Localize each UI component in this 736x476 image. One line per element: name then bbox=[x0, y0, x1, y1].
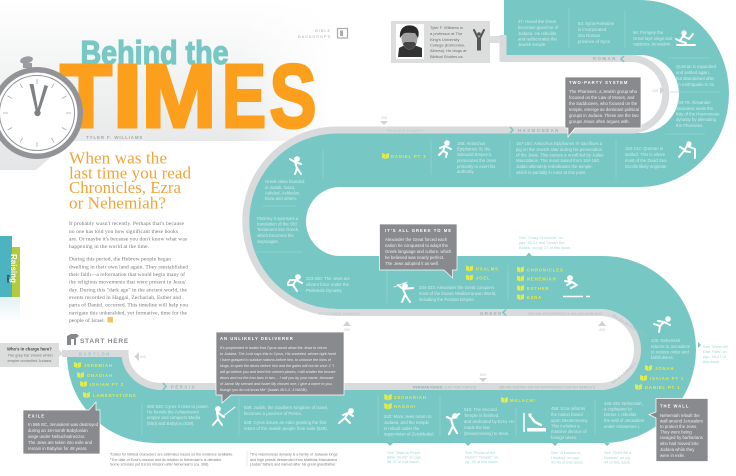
Persian period events: return of the Jewish people from exile (539). bbox=[244, 426, 328, 431]
intro body text: It probably wasn't recently. Perhaps that's because bbox=[69, 221, 185, 227]
book list: Babylonian exile: OBADIAH bbox=[87, 373, 113, 378]
Roman period events: Qumran is expanded bbox=[676, 64, 716, 69]
year markers: 300 and 400: 400 bbox=[599, 328, 605, 332]
events: Nehemiah rebuilds: under Artaxerxes I. bbox=[604, 424, 640, 429]
Roman period events: province of Syria bbox=[578, 39, 611, 44]
author bio panel bbox=[391, 21, 500, 63]
Roman period events: dynasty by alienating bbox=[676, 117, 717, 122]
Greek colonies events: vibrant force under the bbox=[306, 282, 350, 287]
events: temple rebuilt: is rebuilt under the bbox=[384, 426, 420, 431]
author bio panel: College (Edmonton, bbox=[430, 42, 465, 48]
Nehemiah return events: returns to Jerusalem bbox=[651, 344, 691, 349]
events: temple rebuilt: and dedicated by Ezra. He bbox=[464, 419, 515, 424]
footnotes: Some scholars put Ezra's mission after Nehemiah's (ca. 398). bbox=[110, 462, 209, 466]
Hasmonean period events: settled. This is where bbox=[625, 152, 666, 157]
book list: Jonah, Isaiah, Daniel: ISAIAH PT 1 bbox=[650, 376, 684, 381]
events: temple rebuilt: HAGGAI bbox=[394, 404, 416, 409]
footnotes: ²The date of Ezra's mission and its relation to Nehemiah's is debated. bbox=[110, 458, 222, 462]
intro body text: are. Or maybe it's because you don't know what was bbox=[69, 236, 187, 242]
intro body text: happening in the world at the time. bbox=[69, 244, 150, 250]
section tag: Bible Backdrops: BIBLE bbox=[315, 29, 331, 33]
book list: Chronicles to Ezra bbox=[517, 266, 564, 300]
see notes under ribbon: 44 of this issue. bbox=[604, 460, 631, 464]
callout: exile: The Jews are taken into exile and bbox=[28, 440, 93, 445]
Nehemiah return events: faithfulness. bbox=[651, 355, 674, 360]
Greek colonies events: Dora and others. bbox=[265, 196, 297, 201]
Roman period events: into Roman bbox=[578, 33, 601, 38]
see notes under ribbon: Downer" on pg. bbox=[604, 455, 631, 460]
icon: diver bbox=[524, 413, 546, 432]
events: Malachi and Ezra: massive divorce of bbox=[551, 429, 587, 434]
track label: Persian kings bbox=[413, 386, 595, 390]
events: Nehemiah rebuilds: Darius I, rebuilds bbox=[604, 412, 636, 417]
track labels: Ptolemaic and Greek: PTOLEMAIC DYNASTY bbox=[319, 312, 361, 316]
Hasmonean period events bbox=[382, 141, 668, 175]
events: Malachi and Ezra: upon Deuteronomy. bbox=[551, 418, 588, 423]
Roman period events: 103-76: Alexander bbox=[676, 100, 711, 105]
callout: the wall: wall around Jerusalem bbox=[660, 418, 703, 424]
callout: two-party system bbox=[565, 77, 641, 137]
callout: who's in charge: empire controlled Judaea. bbox=[8, 358, 52, 363]
Roman period events: Jannaeus seals the bbox=[676, 106, 714, 111]
events: Malachi and Ezra: This includes a bbox=[551, 424, 580, 428]
track labels: Babylon and Persia: BABYLON bbox=[79, 352, 111, 356]
Roman period events: an earthquake in 31. bbox=[676, 82, 715, 87]
callout: it's all Greek to me: he believed was nearly perfect. bbox=[385, 255, 444, 260]
callout: an unlikely deliverer: doors and cut the iron bars in two.... I call you by your name, because bbox=[220, 376, 334, 380]
see notes under ribbon: See "Don't Be a bbox=[604, 450, 632, 455]
Roman period events: becomes governor of bbox=[518, 25, 559, 30]
Roman period events: 66: Pompey the bbox=[633, 30, 664, 35]
Persian period events: 550-530: Cyrus II rises to power. bbox=[147, 404, 209, 409]
see notes under ribbon: Leaving" on pgs. bbox=[551, 455, 580, 460]
callout: the wall: THE WALL bbox=[660, 404, 689, 408]
callout: who's in charge: The grey bar shows which bbox=[8, 352, 53, 358]
Hasmonean period events: which is partially in ruins at this point. bbox=[516, 170, 587, 175]
book list: Psalms, Joel: PSALMS bbox=[476, 266, 499, 272]
track labels: Ptolemaic and Greek bbox=[319, 310, 602, 316]
year marker: 200 bbox=[380, 116, 388, 125]
heading: TIMES: T bbox=[60, 47, 112, 147]
see notes under ribbon bbox=[387, 443, 632, 464]
track label: Roman: ROMAN bbox=[593, 56, 617, 61]
callout: two-party system: groups in Judaea. These are the two bbox=[569, 113, 639, 118]
book list: Psalms, Joel bbox=[466, 266, 499, 280]
intro body text bbox=[69, 221, 188, 324]
intro question heading: Chronicles, Ezra bbox=[69, 178, 182, 197]
book list: Babylonian exile: JEREMIAH bbox=[84, 363, 113, 368]
Greek colonies events: Septuagint. bbox=[257, 239, 279, 244]
callout: the wall bbox=[649, 398, 708, 462]
callout: who's in charge: Who's in charge here? bbox=[7, 346, 52, 352]
Roman period events: 63: Syria-Palestine bbox=[578, 21, 615, 26]
see notes under ribbon: Return: Temple" on bbox=[465, 454, 498, 460]
events: Malachi and Ezra: MALACHI bbox=[510, 398, 536, 403]
callout: the wall: to protect the Jews. bbox=[660, 424, 697, 429]
intro question heading: When was the bbox=[69, 148, 167, 168]
icon: running figure bbox=[339, 409, 353, 423]
Greek colonies events: including the Persian Empire. bbox=[419, 297, 475, 302]
callout: an unlikely deliverer: of Jacob My servant and Israel My chosen one, I give a name to you, bbox=[220, 382, 333, 386]
Roman period events: Judaea. He rebuilds bbox=[518, 31, 556, 36]
side magazine thumbnail: Bad bbox=[6, 275, 11, 283]
events: Nehemiah rebuilds: 445-433: Nehemiah, bbox=[604, 401, 643, 406]
intro body text: events recorded in Haggai, Zechariah, Esther and bbox=[69, 295, 181, 301]
year marker: 600 bbox=[134, 352, 146, 361]
events: temple rebuilt: (Deuteronomy) to them. bbox=[464, 431, 509, 436]
events: Nehemiah rebuilds: the wall of Jerusalem bbox=[604, 418, 645, 423]
Nehemiah return events bbox=[651, 338, 691, 360]
Persian period events: empire and conquers Media bbox=[147, 415, 201, 420]
events: Malachi and Ezra: foreign wives. bbox=[551, 435, 577, 440]
Roman period events: Great lays siege and bbox=[633, 36, 673, 41]
Hasmonean period events: persecutes the Jews bbox=[457, 158, 496, 163]
Greek colonies events: 334-323: Alexander the Great conquers bbox=[419, 285, 494, 290]
track labels: Ptolemaic and Greek: GREEK bbox=[480, 311, 503, 316]
Hasmonean period events: Judas ultimately rededicates the temple, bbox=[516, 164, 593, 169]
footnotes: ³The Hasmonean dynasty is a family of Judaean kings bbox=[250, 452, 338, 456]
events: temple rebuilt bbox=[384, 394, 515, 436]
footnotes: (Judas' father) and named after his great-grandfather. bbox=[250, 462, 336, 466]
icon: hurdler bbox=[679, 142, 695, 158]
events: Malachi and Ezra bbox=[501, 397, 588, 440]
title backdrop bbox=[0, 0, 331, 170]
callout: it's all Greek to me: IT'S ALL GREEK TO ME bbox=[385, 228, 452, 233]
track labels: Seleucid and Hasmonean: HASMONEAN bbox=[518, 128, 560, 133]
callout: an unlikely deliverer bbox=[216, 332, 344, 403]
grey empire track bbox=[62, 35, 666, 386]
Roman period events: but abandoned after bbox=[676, 76, 715, 81]
intro body text: navigate this unheralded, yet formative, time for the bbox=[69, 309, 188, 316]
events: temple rebuilt: Temple is finished, bbox=[464, 413, 499, 418]
book list: Jonah, Isaiah, Daniel: JONAH bbox=[655, 366, 674, 371]
year marker: 600: 600 bbox=[140, 355, 146, 359]
track labels: Babylon and Persia bbox=[79, 352, 196, 390]
intro body text: the religious movements that were present in Jesus' bbox=[69, 280, 186, 286]
author bio panel: a professor at The bbox=[430, 31, 463, 36]
Roman period events: and rediscorates the bbox=[518, 36, 558, 42]
see note: When All Else Fails: See "When All bbox=[703, 344, 728, 349]
callout: the wall: Judaea while they bbox=[660, 447, 695, 452]
callout: exile: siege under Nebuchadnezzar. bbox=[28, 434, 85, 439]
side magazine thumbnail: Raising bbox=[9, 254, 18, 283]
track labels: Seleucid and Hasmonean: SELEUCID DYNASTY bbox=[386, 129, 426, 133]
Roman period events: is incorporated bbox=[578, 27, 607, 32]
intro body text: day. During this "dark age" in the ancient world, the bbox=[69, 287, 188, 293]
callout: it's all Greek to me: Alexander the Great forced each bbox=[385, 237, 448, 242]
intro body text: no one has told you how significant these books bbox=[69, 228, 178, 235]
book list: Chronicles to Ezra: CHRONICLES bbox=[527, 268, 564, 272]
see note: When All Else Fails: Else Fails" on bbox=[703, 349, 727, 354]
callout: it's all Greek to me: The Jews adopted it as well. bbox=[385, 261, 439, 266]
heading: TIMES: I bbox=[112, 47, 143, 147]
Greek colonies events: Testament into Greek, bbox=[257, 227, 299, 232]
callout: it's all Greek to me: Greek language and culture, which bbox=[385, 249, 452, 254]
see note: When All Else Fails: pgs. 46-47 of bbox=[703, 354, 727, 359]
events: temple rebuilt: supervision of Zerubbabel. bbox=[384, 432, 435, 436]
callout: an unlikely deliverer: though you do not know Me" (Isaiah 45:1-2, 4 NASB). bbox=[220, 388, 308, 392]
track label: Persian kings: PERSIAN KINGS: (LIST AND DATES) bbox=[413, 386, 476, 390]
heading: Behind the: Behind the bbox=[80, 34, 228, 71]
footnotes bbox=[110, 451, 338, 466]
track labels: Babylon and Persia: PERSIA bbox=[171, 384, 196, 390]
events: temple rebuilt: ZECHARIAH bbox=[394, 395, 427, 400]
year marker: 200: 200 bbox=[381, 116, 387, 120]
callout: an unlikely deliverer: I have grasped to subdue nations before him, to unloose the loins of bbox=[220, 358, 332, 362]
icon: hurdle runner bbox=[654, 317, 670, 332]
book list: Babylonian exile: ISAIAH PT 2 bbox=[90, 382, 124, 387]
year marker: 100 bbox=[652, 87, 664, 94]
Greek colonies events: Ashdod, Ashkelon, bbox=[265, 190, 301, 196]
Hasmonean period events: 153-142: Qumran is bbox=[625, 146, 663, 151]
section tag: Bible Backdrops bbox=[298, 28, 348, 39]
callout: two-party system: the Sadducees, who focused on the bbox=[569, 101, 638, 106]
events: Nehemiah rebuilds bbox=[604, 401, 645, 429]
Hasmonean period events: of the Jews. This causes a revolt led by Judas bbox=[516, 152, 604, 158]
book list: Jonah, Isaiah, Daniel: DANIEL PT 1 bbox=[645, 385, 680, 390]
year markers: 300 and 400: 300 bbox=[344, 328, 350, 332]
track labels: Ptolemaic and Greek: 359-338 ARTAXERXES III 336-330 DARIUS III bbox=[528, 312, 602, 316]
Roman period events: fate of the Hasmonean bbox=[676, 112, 720, 116]
Hasmonean period events: DANIEL PT 3 bbox=[391, 154, 426, 159]
Nehemiah return events: to restore order and bbox=[651, 350, 689, 354]
events: temple rebuilt: reads the law bbox=[464, 425, 490, 430]
callout: it's all Greek to me: nation he conquered to adopt the bbox=[385, 243, 449, 248]
Persian period events: He founds the Achaemenid bbox=[147, 410, 199, 414]
heading: TIMES: S bbox=[270, 47, 316, 147]
events: Malachi and Ezra: the nation based bbox=[551, 412, 583, 417]
see notes under ribbon: See "Roots of the bbox=[465, 450, 495, 455]
Roman period events: the Pharisees. bbox=[676, 123, 703, 128]
Persian period events: becomes a province of Persia. bbox=[244, 411, 302, 416]
Nehemiah return events: 435: Nehemiah bbox=[651, 338, 681, 343]
Greek colonies events: in Judah, Gaza, bbox=[265, 185, 295, 190]
callout: the wall: They were being bbox=[660, 430, 692, 434]
events: temple rebuilt: 515: The Second bbox=[464, 407, 497, 412]
Greek colonies events: Ptolemy II sponsors a bbox=[257, 216, 299, 221]
intro body text: During this period, the Hebrew people began bbox=[69, 256, 171, 262]
track label: Roman bbox=[593, 56, 624, 62]
Hasmonean period events: primarily to exert his bbox=[457, 164, 495, 169]
author bio panel: Biblical Studies.ca. bbox=[430, 54, 464, 59]
callout: an unlikely deliverer: will go before you and level the uneven places; I will shatter the bronze bbox=[220, 370, 335, 374]
book list: Babylonian exile bbox=[74, 362, 136, 398]
Roman period events: 37: Herod the Great bbox=[518, 19, 557, 24]
events: temple rebuilt: Judaea, and the temple bbox=[384, 420, 430, 425]
icon: javelin thrower bbox=[394, 282, 413, 302]
Hasmonean period events: Scrolls likely originate. bbox=[625, 164, 668, 169]
see notes under ribbon: See "Start to Finish: bbox=[387, 450, 421, 455]
Roman period events: Jewish temple. bbox=[518, 42, 546, 47]
track label: Persian kings: 486-465 XERXES 465-424 ARTAXERXES I 423-404 DARIUS II bbox=[499, 386, 595, 390]
book list: Jonah, Isaiah, Daniel bbox=[635, 365, 684, 390]
callout: two-party system: temple, emerge as dominant political bbox=[569, 107, 639, 112]
see notes under ribbon: pg. 40 of this issue. bbox=[465, 459, 499, 464]
track labels: right curve: 404-358 ARTAXERXES II bbox=[611, 313, 648, 338]
Greek colonies events bbox=[257, 179, 496, 302]
callout: two-party system: groups Jesus often argues with. bbox=[569, 119, 630, 124]
author bio panel: King's University bbox=[430, 37, 459, 42]
Greek colonies events: 323-200: The Jews are bbox=[306, 276, 350, 281]
callout: an unlikely deliverer: kings, to open the doors before him and the gates will not be shut: 2 "I bbox=[220, 364, 334, 368]
side magazine thumbnail bbox=[0, 236, 21, 322]
footnotes: and high priests descended from Matthias Maccabeus bbox=[250, 458, 337, 462]
year marker: 500: 500 bbox=[480, 373, 486, 377]
icon: discus thrower bbox=[290, 157, 301, 174]
intro body text: their faith—a reformation that would begin many of bbox=[69, 271, 185, 278]
intro question heading bbox=[69, 148, 192, 212]
Greek colonies events: translation of the Old bbox=[257, 222, 297, 226]
callout: the wall: were in exile. bbox=[660, 453, 685, 458]
events: Nehemiah rebuilds: a cupbearer to bbox=[604, 406, 632, 412]
Hasmonean period events: 167-164: Antiochus Epiphanes IV sacrifices a bbox=[516, 141, 603, 146]
see notes under ribbon: 36-37 of this issue. bbox=[387, 459, 420, 464]
Persian period events: (550) and Babylon (539). bbox=[147, 421, 195, 426]
intro body text: dwelling in their own land again. They reestablished bbox=[69, 264, 188, 270]
see notes under ribbon: See "A Lesson in bbox=[551, 450, 581, 455]
icon: runner bbox=[439, 141, 451, 157]
callout: an unlikely deliverer: AN UNLIKELY DELIVERER bbox=[220, 336, 294, 341]
Persian period events: 538: Cyrus issues an edict granting the first bbox=[244, 420, 327, 425]
track labels: Seleucid and Hasmonean bbox=[386, 127, 560, 133]
author bio panel: Tyler F. Williams is bbox=[430, 25, 463, 30]
callout: it's all Greek to me bbox=[380, 224, 457, 278]
Hasmonean period events: 168: Antiochus bbox=[457, 141, 485, 146]
icon: long jumper bbox=[563, 276, 590, 296]
see note: Crazy Chronicle bbox=[519, 235, 571, 256]
Hasmonean period events: most of the Dead Sea bbox=[625, 158, 667, 163]
intro question heading: or Nehemiah? bbox=[69, 194, 166, 212]
Roman period events: and settled again, bbox=[676, 70, 710, 75]
track labels: right curve: 423-404 DARIUS II bbox=[611, 362, 637, 385]
see note: When All Else Fails: this issue. bbox=[703, 359, 720, 364]
year marker: 100: 100 bbox=[652, 89, 658, 93]
Greek colonies events: which becomes the bbox=[257, 233, 294, 238]
callout: exile: remain in Babylon for 48 years. bbox=[28, 446, 87, 451]
year marker: 500 bbox=[479, 373, 487, 382]
see note: Crazy Chronicle: pgs. 35-31 and "Under the bbox=[519, 240, 565, 245]
Hasmonean period events: Epiphanes IV, the bbox=[457, 146, 491, 152]
section tag: Bible Backdrops: BACKDROPS bbox=[298, 35, 331, 39]
events: Malachi and Ezra: 458: Ezra reforms bbox=[551, 406, 585, 411]
callout: the wall: who had moved into bbox=[660, 441, 699, 446]
start here marker: START HERE bbox=[80, 338, 129, 345]
Persian period events bbox=[147, 404, 328, 431]
see note: When All Else Fails bbox=[698, 342, 728, 364]
callout: an unlikely deliverer: It's prophesied in Isaiah that Cyrus would allow the Jews to return bbox=[220, 346, 327, 350]
Hasmonean period events: Seleucid Emperor, bbox=[457, 152, 492, 157]
callout: two-party system: focused on the Law of Moses, and bbox=[569, 95, 635, 100]
see note: Crazy Chronicle: See "Crazy Chronicle" on bbox=[519, 235, 563, 240]
icon: sprinter bbox=[288, 275, 302, 291]
intro question heading: last time you read bbox=[69, 164, 192, 182]
track labels: right curve bbox=[611, 313, 648, 385]
see note: Crazy Chronicle: Books" on pg. 37 of this issue. bbox=[519, 245, 571, 250]
heading: TIMES: M bbox=[142, 47, 216, 147]
book list: Babylonian exile: LAMENTATIONS bbox=[93, 393, 136, 398]
Greek colonies events: Greek cities founded bbox=[265, 179, 305, 184]
intro body text: people of Israel. bbox=[69, 317, 106, 324]
callout: an unlikely deliverer: to Judaea: The Lord says this to Cyrus, His anointed, whose right hand bbox=[220, 352, 337, 356]
callout: two-party system: TWO-PARTY SYSTEM bbox=[569, 80, 628, 85]
book list: Chronicles to Ezra: ESTHER bbox=[527, 286, 549, 291]
callout: two-party system: The Pharisees, a Jewish group who bbox=[569, 89, 638, 94]
book list: Chronicles to Ezra: NEHEMIAH bbox=[527, 276, 557, 282]
Greek colonies events: most of the known Mediterranean World, bbox=[419, 291, 496, 296]
start here marker bbox=[67, 334, 129, 345]
callout: exile: EXILE bbox=[28, 414, 45, 418]
callout: exile: during an 18-month Babylonian bbox=[28, 428, 88, 433]
Roman period events: captures Jerusalem bbox=[633, 42, 671, 46]
year markers: 300 and 400 bbox=[343, 321, 606, 332]
icon: fallen hurdler bbox=[676, 31, 695, 45]
Greek colonies events: Ptolemaic Dynasty. bbox=[306, 288, 342, 293]
heading: TIMES: E bbox=[222, 47, 266, 147]
icon: stopwatch bbox=[0, 55, 83, 159]
events: temple rebuilt: 520: More Jews return to bbox=[384, 414, 432, 419]
callout: exile bbox=[23, 402, 100, 454]
intro body text: parts of Daniel, occurred. This timeline will help you bbox=[69, 302, 188, 309]
book list: Psalms, Joel: JOEL bbox=[476, 276, 491, 280]
Roman period events bbox=[142, 8, 720, 436]
see notes under ribbon: Bible Study" on pgs. bbox=[387, 454, 422, 460]
Hasmonean period events: authority. bbox=[457, 169, 474, 174]
callout: who's in charge bbox=[0, 343, 64, 367]
callout: exile: In 586 BC, Jerusalem was destroyed bbox=[28, 422, 99, 427]
book list: Chronicles to Ezra: EZRA bbox=[527, 295, 542, 300]
icon: swordsman bbox=[213, 407, 235, 425]
author bio panel: Alberta). He blogs at bbox=[430, 48, 467, 53]
Hasmonean period events: pig on the Jewish altar during his persecution bbox=[516, 147, 603, 152]
callout: the wall: Nehemiah rebuilt the bbox=[660, 413, 700, 418]
Hasmonean period events: Maccabeus. The result lasted from 164-160. bbox=[516, 158, 600, 163]
byline: TYLER F. WILLIAMS bbox=[86, 135, 143, 140]
see notes under ribbon: 42-43 of this issue. bbox=[551, 460, 584, 464]
Persian period events: 539: Judah, the Southern Kingdom of Israel, bbox=[244, 405, 328, 410]
footnotes: *Dates for biblical characters are estimates based on the evidence available. bbox=[110, 452, 233, 456]
icon: throwing figure bbox=[447, 414, 459, 434]
callout: the wall: ravaged by barbarians bbox=[660, 435, 703, 440]
